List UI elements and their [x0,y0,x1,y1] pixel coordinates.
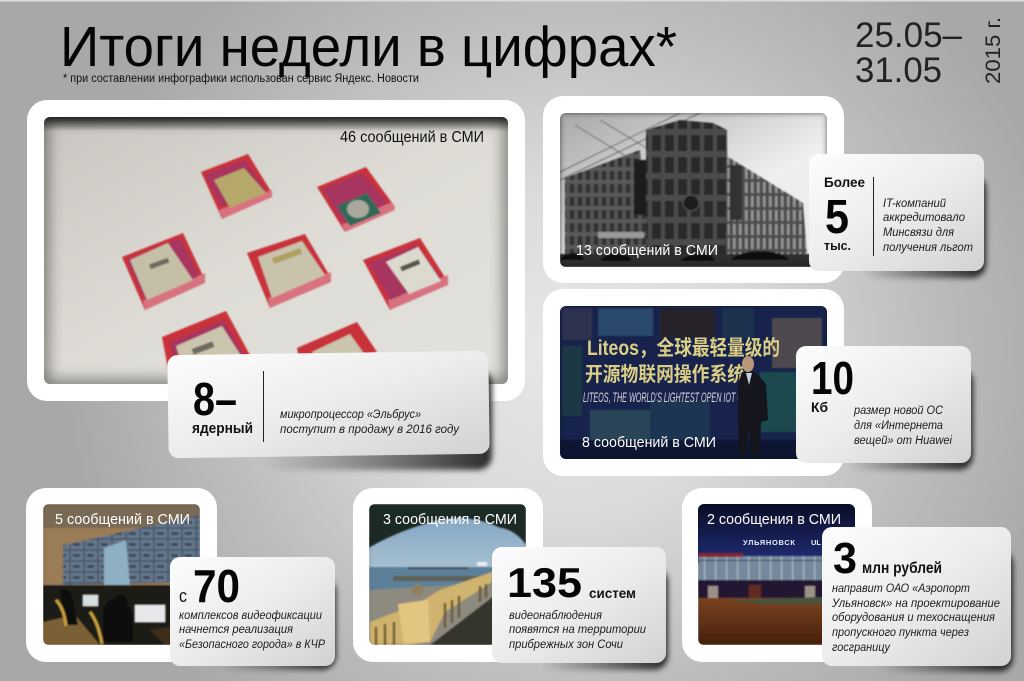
photo: control room [39,500,204,649]
card: 5 thousand: Более [824,174,865,190]
card: 3 million rubles [822,527,1013,672]
card: 5 thousand: 5 [825,191,849,244]
card: 10 Kb: для «Интернета [854,420,943,432]
card: 70 complexes: начнется реализация [179,624,293,636]
card: 3 million rubles: оборудования и техоснащения [832,612,995,624]
photo: processors [40,113,512,390]
photo: Huawei stage: Liteos，全球最轻量级的 [587,336,780,360]
card: 3 million rubles: млн рублей [862,560,942,577]
panel: Sochi [353,488,668,670]
card: 8-core: микропроцессор «Эльбрус» [280,409,421,421]
card: 135 systems: видеонаблюдения [509,610,602,622]
card: 10 Kb [796,346,973,470]
mentions count: 5 сообщений в СМИ [55,511,190,528]
mentions count: 13 сообщений в СМИ [576,242,718,259]
photo: airport: UL [811,538,821,547]
mentions count: 2 сообщения в СМИ [707,511,841,528]
panel: Huawei OS [543,289,973,476]
card: 3 million rubles: 3 [833,534,857,583]
card: 10 Kb: размер новой ОС [853,405,944,417]
photo: airport [694,500,859,649]
card: 3 million rubles: Ульяновск» на проектирование [831,598,1000,610]
photo: Huawei stage [556,302,831,463]
date range: 31.05 [855,51,942,90]
photo: telegraph building [556,109,831,271]
card: 5 thousand: Минсвязи для [883,227,954,239]
card: 5 thousand: IT-компаний [883,198,947,210]
card: 8-core: 8– [193,373,237,425]
card: 5 thousand [809,154,986,278]
card: 5 thousand: тыс. [824,238,851,253]
card: 3 million rubles: направит ОАО «Аэропорт [832,583,970,595]
card: 70 complexes: комплексов видеофиксации [179,610,323,622]
card: 70 complexes: с [179,586,187,606]
photo: Huawei stage: 开源物联网操作系统 [585,362,745,386]
photo: Sochi embankment [365,500,530,649]
photo: airport: УЛЬЯНОВСК [743,538,795,547]
panel: Ulyanovsk airport [682,488,1013,672]
card: 3 million rubles: госграницу [832,642,891,654]
card: 10 Kb: 10 [811,352,854,404]
card: 135 systems: прибрежных зон Сочи [509,639,624,651]
card: 5 thousand: аккредитовало [883,212,966,224]
panel: safe city [26,488,336,670]
card: 8-core [167,351,492,470]
card: 135 systems: 135 [507,559,582,606]
card: 10 Kb: вещей» от Huawei [854,435,952,447]
panel: processor [27,100,525,470]
photo: Huawei stage: LITEOS, THE WORLD'S LIGHTEST OPEN IOT O [583,389,743,405]
date range: 25.05– [855,16,963,55]
card: 5 thousand: получения льгот [883,242,973,254]
footnote: * при составлении инфографики использован сервис Яндекс. Новости [63,73,419,85]
date range [855,16,963,90]
card: 70 complexes: «Безопасного города» в КЧР [179,639,325,651]
mentions count: 46 сообщений в СМИ [340,129,484,146]
mentions count: 8 сообщений в СМИ [582,434,716,451]
card: 135 systems: систем [589,585,636,601]
card: 8-core: поступит в продажу в 2016 году [280,424,460,436]
presenter [738,356,768,457]
card: 70 complexes [170,557,336,670]
panel: IT companies [543,96,986,283]
year: 2015 г. [982,17,1005,84]
card: 70 complexes: 70 [193,560,240,612]
mentions count: 3 сообщения в СМИ [383,511,517,528]
card: 3 million rubles: пропускного пункта через [832,627,970,639]
card: 8-core: ядерный [192,420,253,437]
card: 10 Kb: Кб [811,399,828,415]
card: 135 systems: появятся на территории [509,624,647,636]
card: 135 systems [492,547,668,670]
title: Итоги недели в цифрах* [60,15,677,79]
